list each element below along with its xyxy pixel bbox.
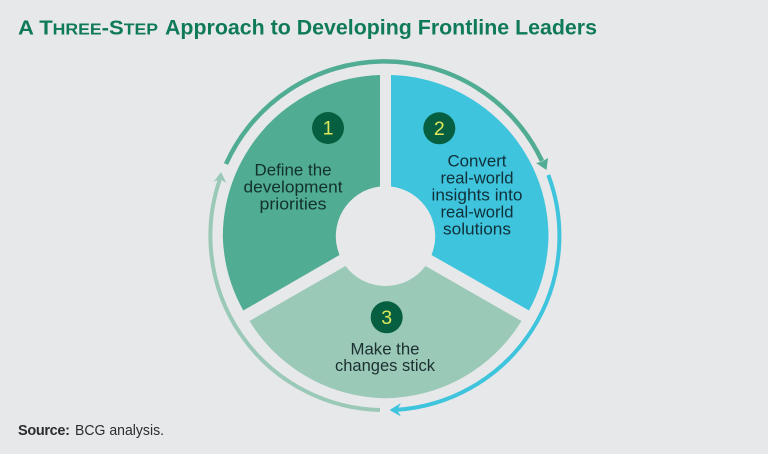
text: define the development priorities: priorities [260, 196, 326, 214]
text: convert real-world insights into real-world solutions: real-world [440, 170, 514, 188]
badge: number 1: 1 [323, 118, 333, 140]
text: convert real-world insights into real-world solutions: Convert [448, 152, 507, 170]
title: Approach to Developing Frontline Leaders [165, 16, 597, 40]
badge: number 2 [423, 112, 455, 144]
badge: number 1 [312, 112, 344, 144]
title: A THREE-STEP [18, 18, 158, 40]
text: define the development priorities: development [244, 178, 343, 196]
arrow: step 2 to step 3 [390, 175, 559, 416]
text: convert real-world insights into real-world solutions: insights into [432, 186, 522, 204]
text: make the changes stick: changes stick [335, 357, 436, 375]
arrow: step 3 to step 1 [210, 172, 380, 410]
text: make the changes stick: Make the [350, 340, 420, 358]
badge: number 3 [371, 301, 403, 333]
text: define the development priorities [244, 162, 343, 214]
text: convert real-world insights into real-world solutions: real-world [440, 204, 514, 222]
segment: step 3 wedge [250, 266, 522, 398]
panel: step 1 [223, 75, 380, 310]
segment: step 1 wedge [223, 75, 380, 310]
badge: number 2: 2 [434, 118, 445, 140]
source note: Source: [18, 423, 70, 439]
text: convert real-world insights into real-world solutions: solutions [443, 220, 511, 238]
panel: step 2 [391, 75, 548, 310]
text: convert real-world insights into real-world solutions [432, 152, 522, 238]
text: make the changes stick [335, 340, 436, 375]
source note: BCG analysis. [75, 423, 164, 439]
badge: number 3: 3 [381, 307, 392, 329]
arrow: step 1 to step 2 [226, 61, 548, 170]
panel: step 3 [250, 266, 522, 398]
text: define the development priorities: Define the [254, 162, 332, 180]
segment: step 2 wedge [391, 75, 548, 310]
